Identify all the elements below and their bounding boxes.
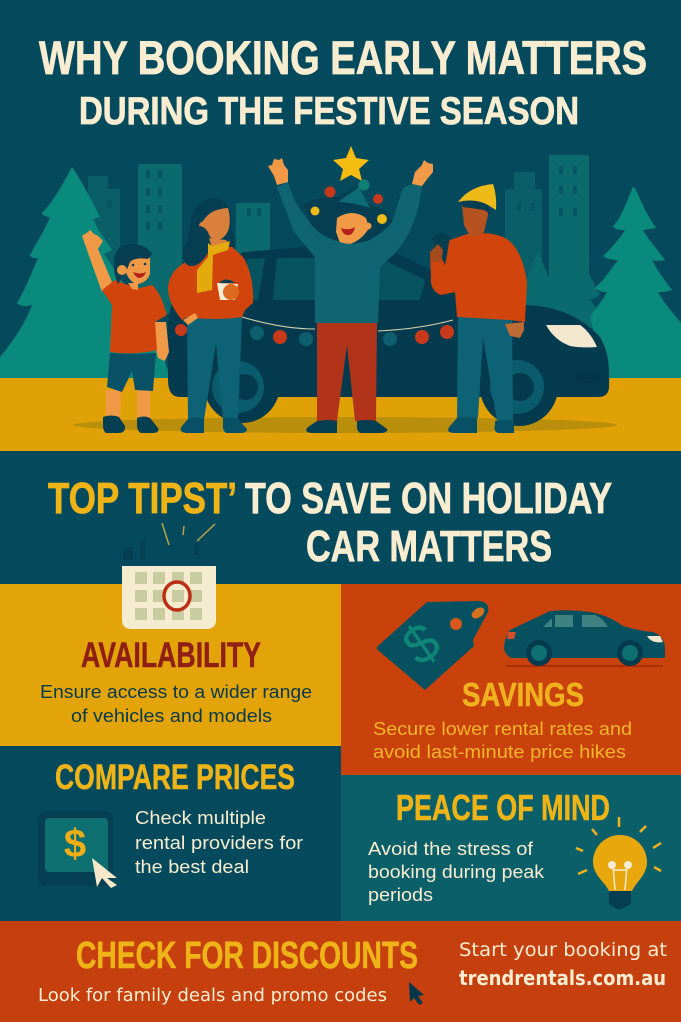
compare prices heading: COMPARE PRICES (55, 758, 295, 797)
savings heading: SAVINGS (462, 676, 584, 713)
peace of mind text (368, 839, 545, 905)
booking call to action (459, 939, 667, 990)
wheels (204, 347, 558, 426)
icon: calendar (122, 523, 216, 629)
savings text: Secure lower rental rates and (373, 719, 632, 739)
title: DURING THE FESTIVE SEASON (79, 90, 579, 133)
ground (0, 378, 681, 451)
icon: monitor with dollar and cursor: $ (64, 822, 86, 866)
compare prices text (135, 808, 303, 877)
heading: top tips (48, 474, 612, 571)
panel: check for discounts (0, 921, 681, 1022)
icon: monitor with dollar and cursor (38, 811, 117, 888)
availability text: Ensure access to a wider range (40, 682, 312, 702)
tree: left (0, 167, 170, 378)
car (168, 243, 609, 426)
availability text: of vehicles and models (71, 706, 272, 726)
background city buildings (88, 155, 589, 314)
man with yellow hat and phone (430, 184, 527, 433)
compare prices text: Check multiple (135, 808, 266, 828)
panel: compare prices (0, 746, 341, 921)
icon: light bulb (576, 817, 661, 910)
availability heading: AVAILABILITY (81, 636, 261, 675)
tree: mid right small trees (515, 245, 606, 340)
icon: car (504, 610, 665, 666)
discounts text: Look for family deals and promo codes (38, 985, 387, 1006)
savings text: avoid last-minute price hikes (373, 742, 626, 762)
peace of mind heading: PEACE OF MIND (396, 787, 610, 828)
garland with baubles (175, 317, 454, 346)
compare prices text: rental providers for (135, 833, 303, 853)
panel: peace of mind (341, 775, 681, 921)
icon: price tag (377, 601, 488, 690)
icon: cursor (409, 982, 424, 1005)
availability text (40, 682, 312, 726)
woman (168, 198, 253, 433)
illustration: family with rental car (0, 146, 681, 451)
panel: savings (341, 584, 681, 775)
panel: availability (0, 523, 341, 746)
booking call to action: Start your booking at (459, 939, 667, 961)
peace of mind text: booking during peak (368, 862, 545, 882)
title (39, 31, 647, 133)
tree: right (590, 187, 681, 378)
peace of mind text: Avoid the stress of (368, 839, 534, 859)
compare prices text: the best deal (135, 857, 249, 877)
ground shadow (73, 417, 617, 433)
savings text (373, 719, 632, 762)
heading: top tips: CAR MATTERS (306, 522, 552, 571)
discounts heading: CHECK FOR DISCOUNTS (76, 935, 418, 977)
icon: price tag: $ (392, 611, 451, 677)
boy (82, 230, 169, 433)
peace of mind text: periods (368, 885, 433, 905)
heading: top tips: TOP TIPST’ (48, 474, 237, 523)
cheering person with tree hat (268, 146, 433, 433)
